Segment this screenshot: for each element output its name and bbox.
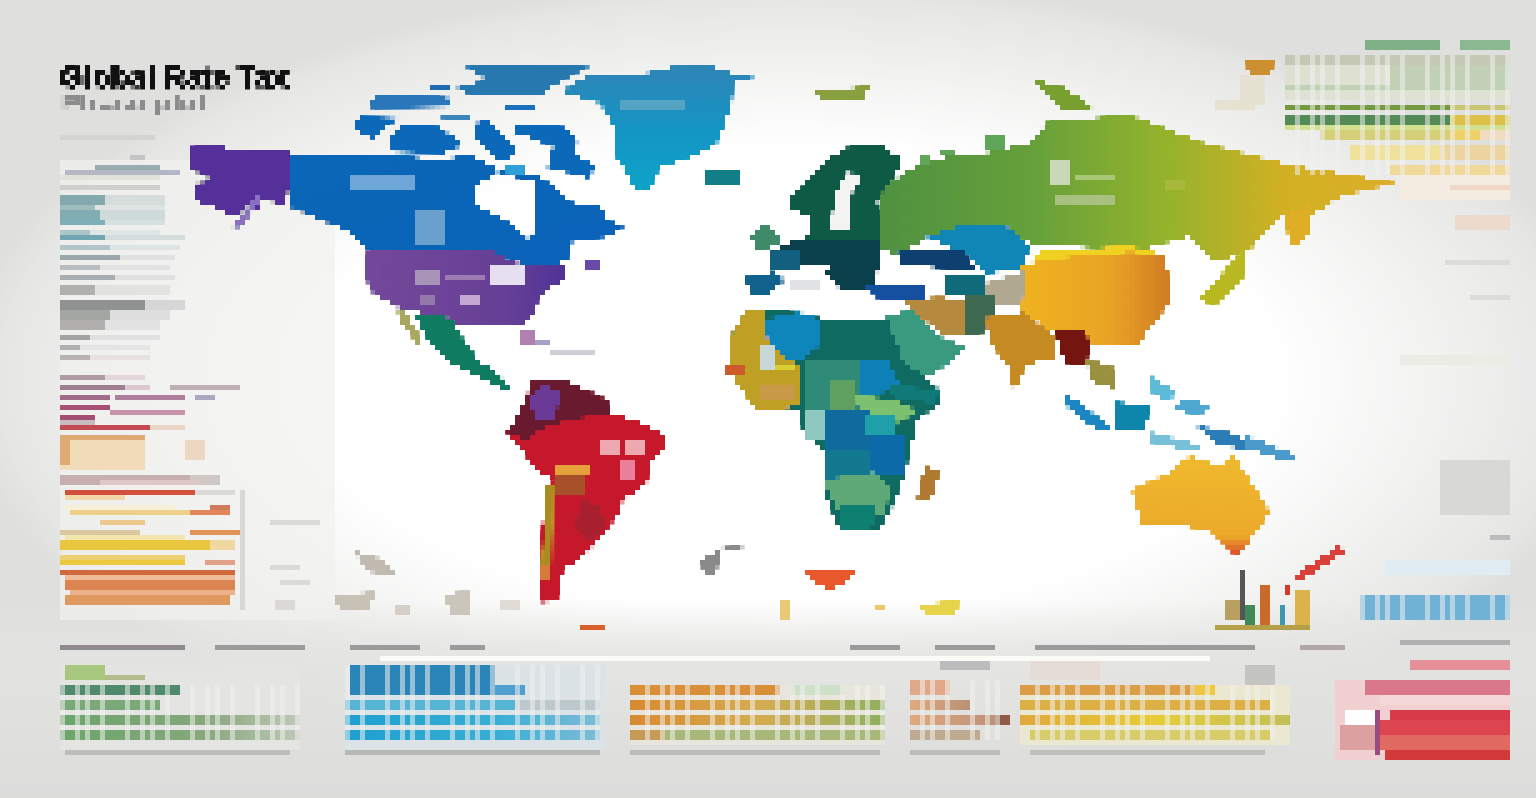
Tibet tan	[987, 270, 1027, 305]
Chad green	[830, 380, 854, 408]
Arabia	[887, 310, 967, 376]
map: Alaska peninsula	[232, 195, 262, 228]
Caucasus navy	[897, 250, 975, 270]
Great Lakes bit	[583, 262, 598, 272]
Italy	[825, 265, 862, 290]
Southern Africa	[823, 472, 890, 515]
Chukotka tip	[1245, 60, 1275, 75]
antarctic and island fragments	[332, 543, 960, 630]
Caspian lower teal	[947, 273, 987, 297]
map: Australia	[1132, 456, 1270, 556]
Congo blue	[823, 410, 877, 450]
label: Canada	[352, 175, 414, 189]
map: Alaska	[190, 143, 288, 215]
map: Arctic islands	[353, 67, 597, 178]
left panel: orange table	[62, 477, 244, 611]
left panel backdrop	[60, 160, 335, 620]
France	[768, 250, 800, 272]
map: Indonesia and Philippines	[1065, 376, 1295, 462]
Angola teal	[823, 450, 870, 480]
map: Greenland	[563, 67, 760, 188]
data labels	[598, 440, 620, 454]
Central band	[803, 360, 860, 410]
Patagonia tip	[538, 565, 548, 579]
Argentina detail	[575, 500, 606, 540]
Sahara blue	[763, 312, 820, 362]
table: yellow	[1020, 662, 1288, 753]
bottom band background	[0, 600, 1536, 798]
Chile edge	[542, 483, 553, 567]
right column faint text	[1400, 258, 1510, 540]
Africa base	[728, 312, 940, 530]
Turkey	[863, 283, 925, 300]
Congo pale	[803, 410, 830, 438]
chart: right blue panel	[1362, 560, 1510, 621]
table: small tan	[912, 660, 1008, 753]
table: blue	[343, 665, 603, 753]
title: Global Rate Tax	[60, 62, 288, 94]
Madagascar	[917, 467, 940, 500]
label: Greenland	[620, 100, 685, 110]
Sudan blue	[860, 360, 903, 395]
Mozambique blue	[870, 437, 905, 473]
Southeast Asia	[1085, 360, 1116, 388]
Colombia purple	[528, 385, 560, 420]
Pakistan and Afghanistan	[963, 297, 993, 337]
Paraguay brown	[557, 477, 584, 497]
icon: USA chart glyph	[415, 265, 524, 306]
subtitle: Phase plot	[61, 92, 207, 115]
Venezuela and Colombia	[507, 380, 610, 440]
Tanzania teal	[867, 417, 893, 437]
table: red	[1337, 660, 1510, 758]
West Africa detail	[727, 365, 745, 375]
Japan and Sakhalin	[1285, 205, 1312, 248]
West Africa	[728, 312, 800, 408]
Scandinavia and Eastern Europe	[790, 143, 903, 265]
Ethiopia teal	[890, 385, 940, 403]
South America body	[507, 380, 665, 603]
right top table	[1285, 42, 1510, 230]
left panel: rate list	[60, 134, 240, 470]
left faint labels	[195, 490, 320, 610]
map: Central Asia	[927, 227, 1030, 273]
island	[815, 86, 870, 102]
map: Canada	[288, 153, 623, 270]
UK and Ireland	[750, 225, 780, 250]
label in Russia	[1050, 160, 1187, 205]
islands north of Russia	[920, 135, 1003, 163]
Horn green	[855, 395, 917, 423]
map: Mexico and Central America	[415, 313, 510, 393]
South tip	[840, 507, 877, 532]
chart: small bars	[1216, 545, 1345, 629]
icon: Canada chart glyph	[415, 208, 447, 244]
table: green	[60, 665, 300, 753]
India	[985, 312, 1057, 392]
map: USA	[363, 250, 567, 327]
Arctic island	[1035, 80, 1095, 110]
Mediterranean speckle	[790, 280, 820, 292]
Iran	[902, 297, 965, 337]
map: Europe	[743, 143, 903, 297]
Mongolia band	[1030, 246, 1165, 265]
map: South America	[507, 380, 665, 603]
map: Iceland	[707, 170, 740, 183]
Bangladesh maroon	[1055, 328, 1092, 366]
Chukotka labels	[1215, 75, 1265, 110]
table: orange	[629, 685, 887, 753]
map: Russia	[880, 115, 1395, 262]
China	[1020, 252, 1172, 346]
Iberia	[743, 272, 785, 297]
Baltic gap	[830, 172, 862, 232]
bottom header labels	[61, 641, 1510, 651]
map: Africa	[727, 312, 940, 532]
white highlight bar	[380, 656, 1210, 661]
map: Caribbean strokes	[522, 332, 595, 356]
map: Baja	[397, 310, 422, 345]
Bolivia band	[553, 463, 590, 477]
Central Europe	[770, 238, 880, 290]
